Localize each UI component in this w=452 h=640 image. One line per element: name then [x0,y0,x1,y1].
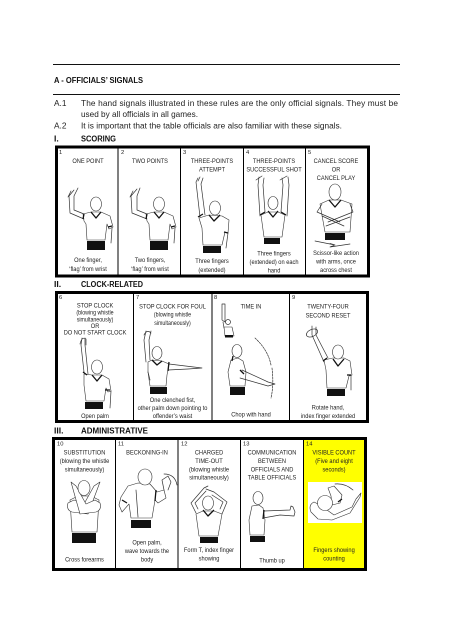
text block: rule A.1: used by all officials in all games. [81,109,198,119]
signal 9: twenty-four second reset: Rotate hand, [312,404,345,412]
signal 14: visible count: counting [323,555,345,563]
signal 5: cancel score or cancel play: OR [332,166,341,174]
signal 13: communication between officials and table officials: TABLE OFFICIALS [248,474,296,482]
signal 7: stop clock for foul: 7 [136,295,139,301]
signal 12: charged time-out: TIME-OUT [195,458,223,465]
signal 3: three-points attempt: (extended) [198,267,226,274]
signal 9: twenty-four second reset: index finger extended [301,413,356,420]
signal 5: cancel score or cancel play: CANCEL PLAY [317,175,355,182]
signal 5: cancel score or cancel play: 5 [308,150,311,156]
signal 14: visible count [306,442,362,563]
signal 3: three-points attempt: ATTEMPT [199,166,225,174]
panel: clock-related [56,292,368,422]
signal 6: stop clock: (blowing whistle [76,310,114,317]
signal 7: stop clock for foul: other palm down pointing to [138,405,208,412]
heading: clock-related: II. [54,279,61,289]
signal 4: three-points successful shot: (extended) on each [250,259,299,266]
signal 9: twenty-four second reset: SECOND RESET [306,312,351,320]
signal 4: three-points successful shot [246,150,302,275]
signal 6: stop clock: 6 [59,295,62,301]
signal 14: visible count: 14 [306,442,313,448]
signal 8: time in: 8 [214,295,217,301]
signal 13: communication between officials and table officials: BETWEEN [258,458,286,465]
text block: rule A.2: It is important that the table officials are also familiar with these signals. [81,120,342,130]
heading: clock-related [54,279,143,289]
signal 2: two points [121,150,176,273]
signal 9: twenty-four second reset: 9 [292,295,295,301]
signal 1: one point: ONE POINT [72,158,104,165]
heading: scoring [54,134,116,144]
signal 6: stop clock: simultaneously) [77,317,113,324]
signal 3: three-points attempt [183,150,233,274]
signal 5: cancel score or cancel play: across chest [320,267,352,274]
signal 14: visible count: seconds) [322,466,346,474]
signal 11: beckoning-in: BECKONING-IN [126,449,168,457]
heading: clock-related: CLOCK-RELATED [81,279,143,289]
signal 10: substitution: 10 [57,442,63,448]
signal 6: stop clock: Open palm [81,413,109,420]
signal 11: beckoning-in: wave towards the [124,548,170,555]
signal 2: two points: TWO POINTS [132,158,168,165]
signal 7: stop clock for foul: offender’s waist [153,413,193,420]
signal 8: time in [214,295,275,419]
signal 13: communication between officials and table officials [243,442,296,565]
signal 10: substitution: simultaneously) [65,466,104,474]
signal 9: twenty-four second reset: TWENTY-FOUR [307,303,349,311]
signal 11: beckoning-in: 11 [118,442,124,448]
signal 7: stop clock for foul [136,295,208,420]
signal 2: two points: ‘flag’ from wrist [131,266,169,273]
signal 11: beckoning-in [118,442,177,564]
signal 4: three-points successful shot: Three fingers [257,250,291,258]
signal 8: time in: Chop with hand [231,411,271,419]
signal 12: charged time-out: Form T, index finger [184,547,234,554]
signal 7: stop clock for foul: simultaneously) [154,321,191,327]
signal 12: charged time-out: simultaneously) [189,474,229,482]
signal 5: cancel score or cancel play: CANCEL SCORE [314,158,358,165]
signal 4: three-points successful shot: hand [268,267,281,275]
signal 7: stop clock for foul: (blowing whistle [154,312,191,319]
signal 3: three-points attempt: Three fingers [195,258,229,265]
signal 8: time in: TIME IN [241,303,261,311]
heading: scoring: I. [54,134,59,144]
signal 13: communication between officials and table officials: Thumb up [259,557,285,565]
signal 4: three-points successful shot: THREE-POINTS [253,158,295,165]
signal 7: stop clock for foul: One clenched fist, [150,397,196,404]
text block: rule A.1: The hand signals illustrated in these rules are the only official signals. They must be [81,98,398,108]
signal 4: three-points successful shot: SUCCESSFUL SHOT [246,166,302,174]
signal 1: one point: One finger, [74,257,102,264]
signal 5: cancel score or cancel play: Scissor-like action [313,250,359,257]
signal 12: charged time-out: 12 [181,442,187,448]
signal 6: stop clock: OR [91,323,100,330]
signal 9: twenty-four second reset [292,295,356,420]
signal 1: one point: 1 [59,150,62,156]
signal 12: charged time-out: (blowing whistle [189,466,230,474]
signal 11: beckoning-in: Open palm, [132,539,162,547]
signal 5: cancel score or cancel play [308,150,359,274]
signal 12: charged time-out: showing [199,555,220,563]
text block: rule A.2: A.2 [54,120,67,130]
signal 1: one point [59,150,113,273]
signal 13: communication between officials and table officials: 13 [243,442,249,448]
signal 5: cancel score or cancel play: with arms, once [315,258,356,266]
signal 3: three-points attempt: THREE-POINTS [191,158,233,165]
signal 10: substitution: Cross forearms [65,556,104,564]
heading: administrative [54,426,148,436]
signal 7: stop clock for foul: STOP CLOCK FOR FOUL [139,303,206,311]
panel: scoring [56,147,368,276]
signal 10: substitution: SUBSTITUTION [64,449,105,457]
signal 14: visible count: (Five and eight [315,458,353,465]
signal 4: three-points successful shot: 4 [246,150,250,156]
signal 10: substitution: (blowing the whistle [60,458,110,465]
heading: administrative: III. [54,426,64,436]
signal 12: charged time-out: CHARGED [195,449,224,457]
signal 2: two points: Two fingers, [135,257,166,264]
text block: rule A.1: A.1 [54,98,67,108]
signal 3: three-points attempt: 3 [183,150,186,156]
panel: administrative [54,438,366,570]
heading: scoring: SCORING [81,134,116,144]
heading: administrative: ADMINISTRATIVE [81,426,148,436]
signal 2: two points: 2 [121,150,124,156]
signal 11: beckoning-in: body [141,556,154,564]
signal 10: substitution [57,442,110,564]
text block: rule A.1 [54,98,398,119]
signal 13: communication between officials and table officials: COMMUNICATION [248,449,296,457]
signal 14: visible count: Fingers showing [313,547,355,554]
title: A - OFFICIALS’ SIGNALS [54,75,143,85]
signal 6: stop clock [59,295,127,420]
signal 13: communication between officials and table officials: OFFICIALS AND [251,466,294,474]
signal 14: visible count: VISIBLE COUNT [312,449,356,457]
signal 1: one point: ‘flag’ from wrist [69,266,107,273]
signal 6: stop clock: DO NOT START CLOCK [64,329,127,337]
signal 12: charged time-out [181,442,234,563]
signal 6: stop clock: STOP CLOCK [77,302,114,310]
